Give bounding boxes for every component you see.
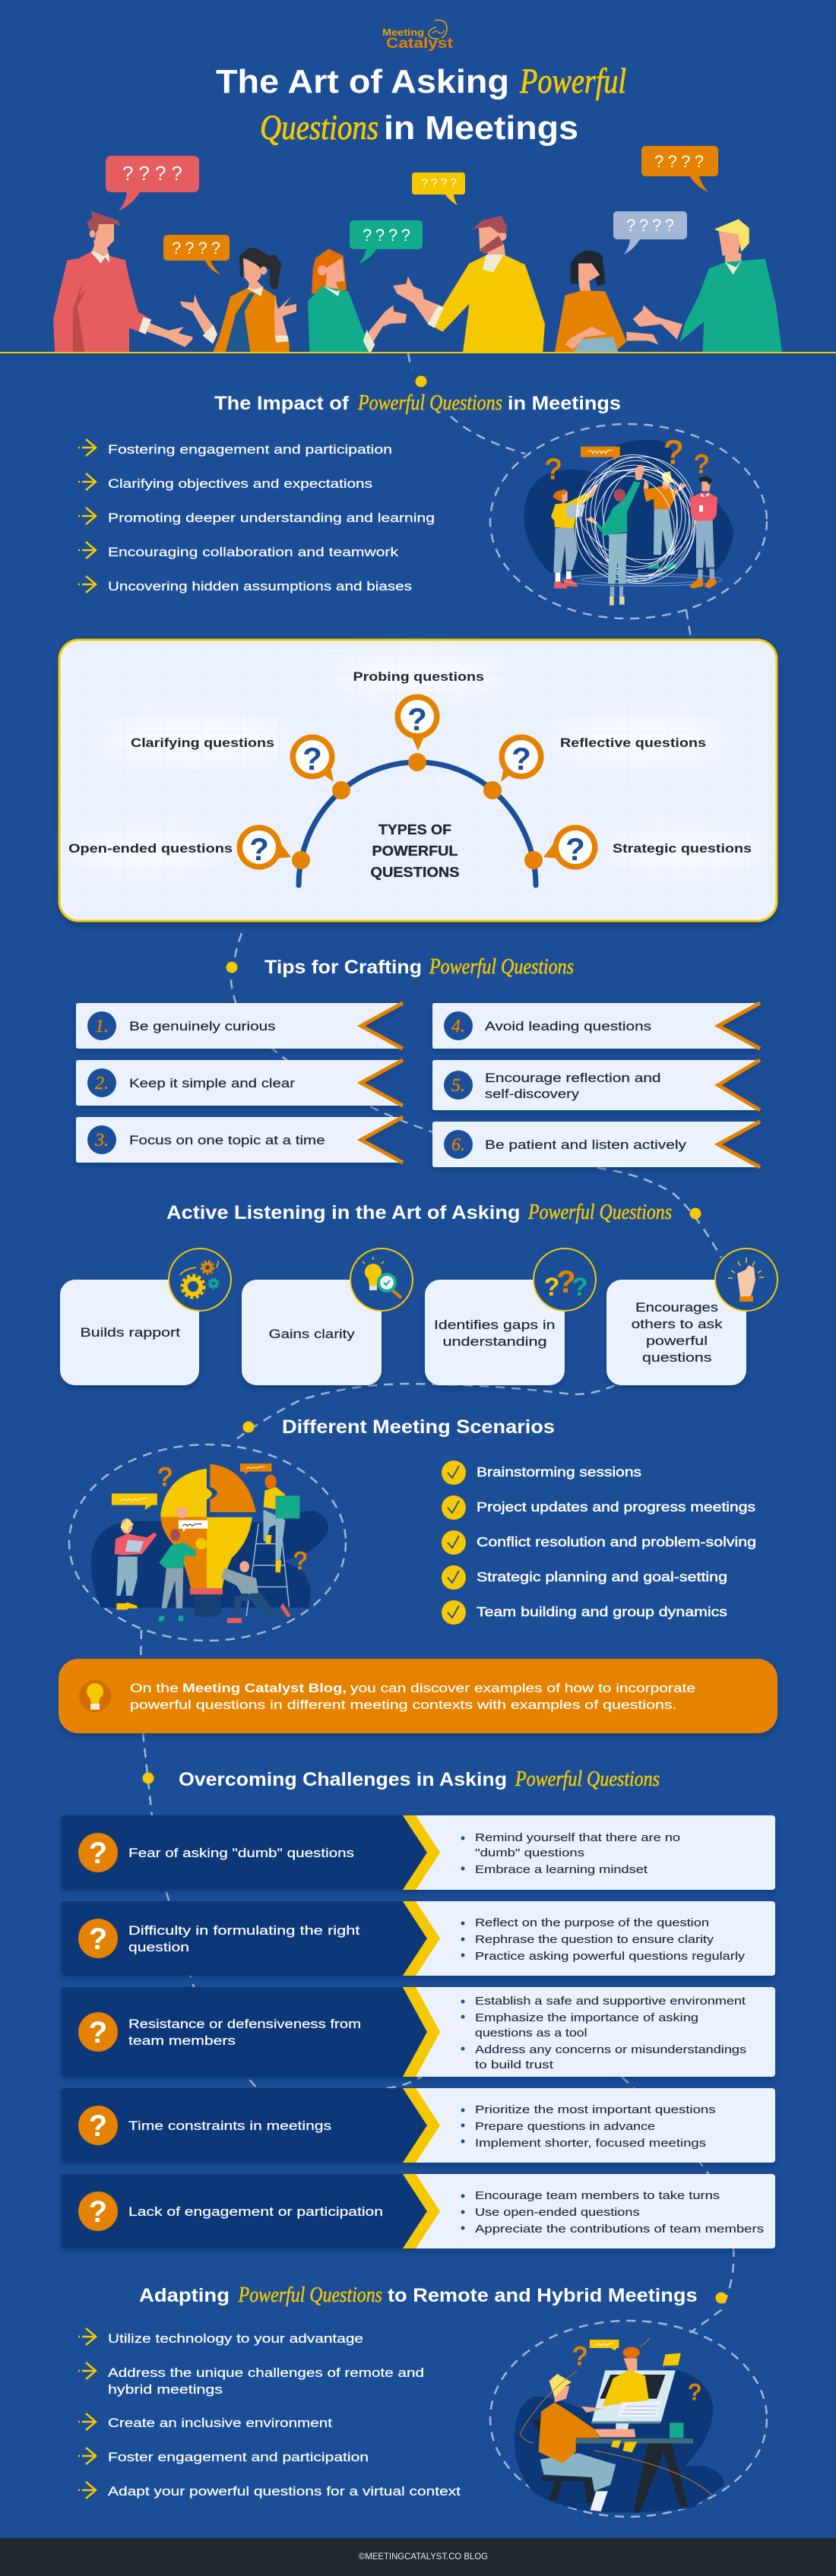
challenge 4: ? — [89, 2109, 107, 2143]
card: gains clarity — [242, 1248, 413, 1385]
bubble: orange left — [163, 235, 230, 275]
illustration: people and tangled scribble: ? — [545, 454, 562, 486]
list: remote bullets: Utilize technology to your advantage — [108, 2331, 363, 2346]
person: woman in green sweater — [308, 248, 407, 354]
person: woman in orange sweater — [555, 250, 658, 353]
challenge 3: questions as a tool — [475, 2027, 587, 2040]
chart: arc — [299, 762, 536, 885]
challenge 3 — [61, 1987, 775, 2077]
speech box — [581, 447, 620, 460]
bubble: yellow: ???? — [421, 177, 457, 190]
tip 6: Be patient and listen actively — [485, 1138, 687, 1152]
callout text: On the — [130, 1681, 179, 1695]
heading: active listening: Active Listening in the Art of Asking — [166, 1202, 520, 1223]
challenge 5: Encourage team members to take turns — [475, 2189, 720, 2202]
callout text: powerful questions in different meeting contexts with examples of questions. — [130, 1698, 676, 1712]
list: remote bullets: Create an inclusive environment — [108, 2416, 332, 2430]
tip 3: 3. — [94, 1131, 109, 1150]
tip 6: 6. — [451, 1135, 465, 1155]
challenge 5: Use open-ended questions — [475, 2206, 640, 2219]
bubble: grey: ???? — [626, 216, 674, 235]
challenge 2: Difficulty in formulating the right — [128, 1923, 360, 1938]
footer: ©MEETINGCATALYST.CO BLOG — [359, 2551, 488, 2562]
list: scenario checks: Conflict resolution and problem-solving — [477, 1534, 756, 1549]
heading: remote and hybrid: Powerful Questions — [238, 2283, 382, 2307]
challenge 3: Address any concerns or misunderstandings — [475, 2043, 746, 2056]
heading: remote and hybrid — [139, 2283, 698, 2307]
tip 3 — [76, 1117, 403, 1163]
title: Questions — [260, 108, 378, 147]
tip 1: 1. — [95, 1017, 109, 1036]
heading: tips: Tips for Crafting — [264, 957, 422, 978]
tip 1: Be genuinely curious — [129, 1019, 275, 1033]
bubble: green: ???? — [363, 226, 410, 245]
list: impact bullets: Clarifying objectives and expectations — [108, 476, 372, 491]
list: scenario checks — [442, 1460, 756, 1625]
title: in Meetings — [384, 109, 578, 147]
illustration: giant bulb puzzle with people: ? — [293, 1547, 307, 1574]
illustration: remote video call at desk: ? — [573, 2342, 587, 2371]
connector dot — [690, 1208, 701, 1219]
challenge 3: to build trust — [475, 2059, 554, 2071]
list: remote bullets: Foster engagement and participation — [108, 2450, 369, 2464]
tip 6 — [432, 1122, 760, 1167]
tip 5: 5. — [451, 1076, 465, 1096]
connector dot — [243, 1421, 254, 1433]
tip 4: Avoid leading questions — [485, 1019, 651, 1033]
list: remote bullets: Adapt your powerful questions for a virtual context — [108, 2484, 461, 2498]
person: man in red sweater — [53, 211, 192, 353]
bubble: orange right: ???? — [654, 152, 704, 171]
heading: impact: The Impact of — [214, 393, 350, 414]
list: impact bullets: Fostering engagement and participation — [108, 442, 392, 457]
bubble: orange left: ???? — [172, 239, 220, 258]
list: remote bullets: Address the unique challenges of remote and — [108, 2366, 424, 2380]
challenges table — [61, 1815, 775, 2248]
connector dot — [226, 962, 237, 973]
list: impact bullets: Promoting deeper understanding and learning — [108, 511, 435, 525]
person: bearded man in yellow sweater — [393, 216, 545, 353]
title — [216, 62, 626, 147]
card: encourages others: questions — [642, 1350, 711, 1365]
person: yellow sweater with laptop — [551, 484, 598, 588]
callout: blog banner — [59, 1659, 777, 1733]
tip 4 — [432, 1003, 760, 1049]
arc nodes and pins: ? — [565, 831, 585, 867]
card: gains clarity: Gains clarity — [269, 1327, 355, 1341]
illustration: giant bulb puzzle with people: ? — [158, 1463, 172, 1492]
card: builds rapport: Builds rapport — [81, 1325, 180, 1340]
tip 5 — [432, 1060, 760, 1110]
labels: Clarifying questions — [131, 736, 274, 750]
list: impact bullets: Encouraging collaboration and teamwork — [108, 545, 399, 559]
illustration: people and tangled scribble — [490, 424, 767, 619]
bubble: red: ???? — [122, 162, 182, 185]
list: scenario checks: Brainstorming sessions — [477, 1464, 641, 1479]
list: scenario checks: Strategic planning and goal-setting — [477, 1569, 727, 1584]
center label: TYPES OF — [378, 822, 451, 837]
challenge 4: Implement shorter, focused meetings — [475, 2137, 706, 2150]
person: red sweater with crossed arms — [689, 476, 717, 588]
heading: remote and hybrid: to Remote and Hybrid Meetings — [388, 2285, 698, 2306]
title: Powerful — [519, 62, 626, 101]
list: impact bullets: Uncovering hidden assumptions and biases — [108, 579, 412, 593]
illustration: remote video call at desk: ? — [689, 2380, 701, 2405]
bubble: orange right — [641, 146, 718, 192]
card: encourages others: Encourages — [635, 1300, 718, 1315]
panel: types of powerful questions — [59, 640, 777, 921]
illustration: people and tangled scribble: ? — [695, 450, 708, 479]
connector dot — [143, 1772, 154, 1784]
tip 2: Keep it simple and clear — [129, 1076, 295, 1090]
logo: Catalyst — [386, 36, 454, 52]
heading: challenges: Overcoming Challenges in Asking — [179, 1769, 507, 1790]
tips cards — [76, 1003, 760, 1167]
logo — [382, 20, 454, 52]
labels: Reflective questions — [560, 736, 706, 750]
heading: tips: Powerful Questions — [429, 954, 574, 979]
arc nodes and pins: ? — [249, 831, 269, 867]
section: impact — [78, 391, 767, 619]
arc nodes and pins: ? — [407, 701, 427, 737]
challenge 3: Emphasize the importance of asking — [475, 2011, 698, 2024]
bubble: green — [350, 220, 423, 264]
heading: impact: in Meetings — [508, 393, 621, 414]
card: identifies gaps: ? — [544, 1273, 559, 1302]
tip 2: 2. — [95, 1074, 109, 1093]
list: impact bullets — [78, 439, 435, 593]
challenge 4 — [61, 2088, 775, 2163]
challenge 5: ? — [89, 2195, 107, 2229]
card: identifies gaps: understanding — [442, 1334, 547, 1349]
tip 5: Encourage reflection and — [485, 1071, 661, 1085]
footer — [0, 2538, 836, 2576]
challenge 2: ? — [89, 1923, 107, 1956]
challenge 3: ? — [89, 2016, 107, 2049]
person: orange sweater — [644, 471, 686, 571]
illustration: people and tangled scribble: ? — [664, 434, 682, 471]
callout text — [130, 1681, 695, 1712]
challenge 3: Establish a safe and supportive environment — [475, 1995, 746, 2008]
challenge 3: Resistance or defensiveness from — [128, 2017, 361, 2031]
connector dot — [415, 375, 427, 388]
tip 5: self-discovery — [485, 1087, 580, 1101]
bubble: grey — [613, 211, 687, 255]
card: encourages others: powerful — [646, 1334, 708, 1348]
heading: active listening: Powerful Questions — [527, 1200, 672, 1224]
person: woman in orange jacket — [180, 248, 296, 353]
challenge 5: Appreciate the contributions of team members — [475, 2223, 764, 2236]
heading: impact: Powerful Questions — [357, 391, 502, 415]
card: encourages others: others to ask — [632, 1317, 723, 1331]
challenge 1: Embrace a learning mindset — [475, 1863, 648, 1876]
challenge 2: Reflect on the purpose of the question — [475, 1916, 709, 1929]
tip 3: Focus on one topic at a time — [129, 1133, 325, 1147]
challenge 1: Remind yourself that there are no — [475, 1831, 680, 1844]
challenge 2: question — [128, 1940, 189, 1954]
labels: Probing questions — [353, 669, 484, 684]
challenge 1: "dumb" questions — [475, 1847, 584, 1859]
heading: impact — [214, 391, 621, 415]
list: remote bullets — [78, 2328, 461, 2498]
illustration: giant bulb puzzle with people — [69, 1445, 346, 1641]
person: green centre figure redrawn over scribble — [608, 533, 627, 584]
heading: active listening — [166, 1200, 672, 1224]
labels: Open-ended questions — [68, 841, 233, 856]
callout text: Meeting Catalyst Blog, — [182, 1681, 347, 1695]
logo: Meeting — [382, 27, 424, 38]
tip 4: 4. — [451, 1017, 465, 1036]
illustration: three people on the left of the conversation — [53, 211, 407, 354]
card: identifies gaps: ? — [556, 1264, 576, 1299]
heading: remote and hybrid: Adapting — [139, 2285, 230, 2306]
heading: challenges — [179, 1767, 660, 1791]
connector dot — [716, 2292, 727, 2304]
list: remote bullets: hybrid meetings — [108, 2382, 223, 2397]
person: green sweater from behind — [585, 465, 644, 606]
labels — [68, 669, 752, 856]
challenge 5 — [61, 2174, 775, 2248]
challenge 2: Practice asking powerful questions regularly — [475, 1950, 746, 1963]
speech bubbles — [106, 146, 718, 275]
list: scenario checks: Project updates and progress meetings — [477, 1499, 755, 1514]
arc nodes and pins: ? — [511, 741, 531, 777]
bubble: yellow — [412, 172, 465, 205]
challenge 5: Lack of engagement or participation — [128, 2204, 383, 2219]
callout text: you can discover examples of how to incorporate — [350, 1681, 695, 1695]
card: builds rapport — [60, 1248, 231, 1385]
person: blond man in green sweater — [633, 219, 782, 353]
illustration: three people on the right of the conversation — [393, 216, 782, 353]
challenge 1 — [61, 1815, 775, 1890]
arc nodes and pins — [237, 695, 597, 869]
heading: challenges: Powerful Questions — [515, 1767, 660, 1791]
tangled scribble — [553, 438, 722, 603]
challenge 4: Prepare questions in advance — [475, 2120, 655, 2133]
bubble: red — [106, 156, 199, 211]
arc nodes and pins: ? — [302, 741, 322, 777]
card: identifies gaps: ? — [572, 1273, 587, 1302]
icon: light bulb — [79, 1680, 111, 1712]
illustration: remote video call at desk — [490, 2321, 767, 2517]
heading: tips — [264, 954, 574, 979]
center label: QUESTIONS — [371, 865, 459, 880]
active listening cards — [60, 1248, 777, 1385]
challenge 4: Prioritize the most important questions — [475, 2103, 716, 2116]
challenge 2 — [61, 1901, 775, 1976]
card: encourages others — [606, 1248, 777, 1385]
center label — [371, 822, 459, 880]
tip 2 — [76, 1060, 403, 1106]
challenge 3: team members — [128, 2033, 236, 2048]
challenge 4: Time constraints in meetings — [128, 2119, 331, 2133]
card: identifies gaps — [425, 1248, 596, 1385]
challenge 1: Fear of asking "dumb" questions — [128, 1846, 354, 1860]
tip 1 — [76, 1003, 403, 1049]
challenge 2: Rephrase the question to ensure clarity — [475, 1933, 714, 1946]
labels: Strategic questions — [613, 841, 752, 856]
center label: POWERFUL — [372, 843, 458, 859]
card: identifies gaps: Identifies gaps in — [434, 1318, 555, 1332]
list: scenario checks: Team building and group dynamics — [477, 1604, 727, 1619]
challenge 1: ? — [89, 1837, 107, 1870]
title: The Art of Asking — [216, 63, 509, 100]
heading: meeting scenarios: Different Meeting Scenarios — [282, 1416, 555, 1438]
